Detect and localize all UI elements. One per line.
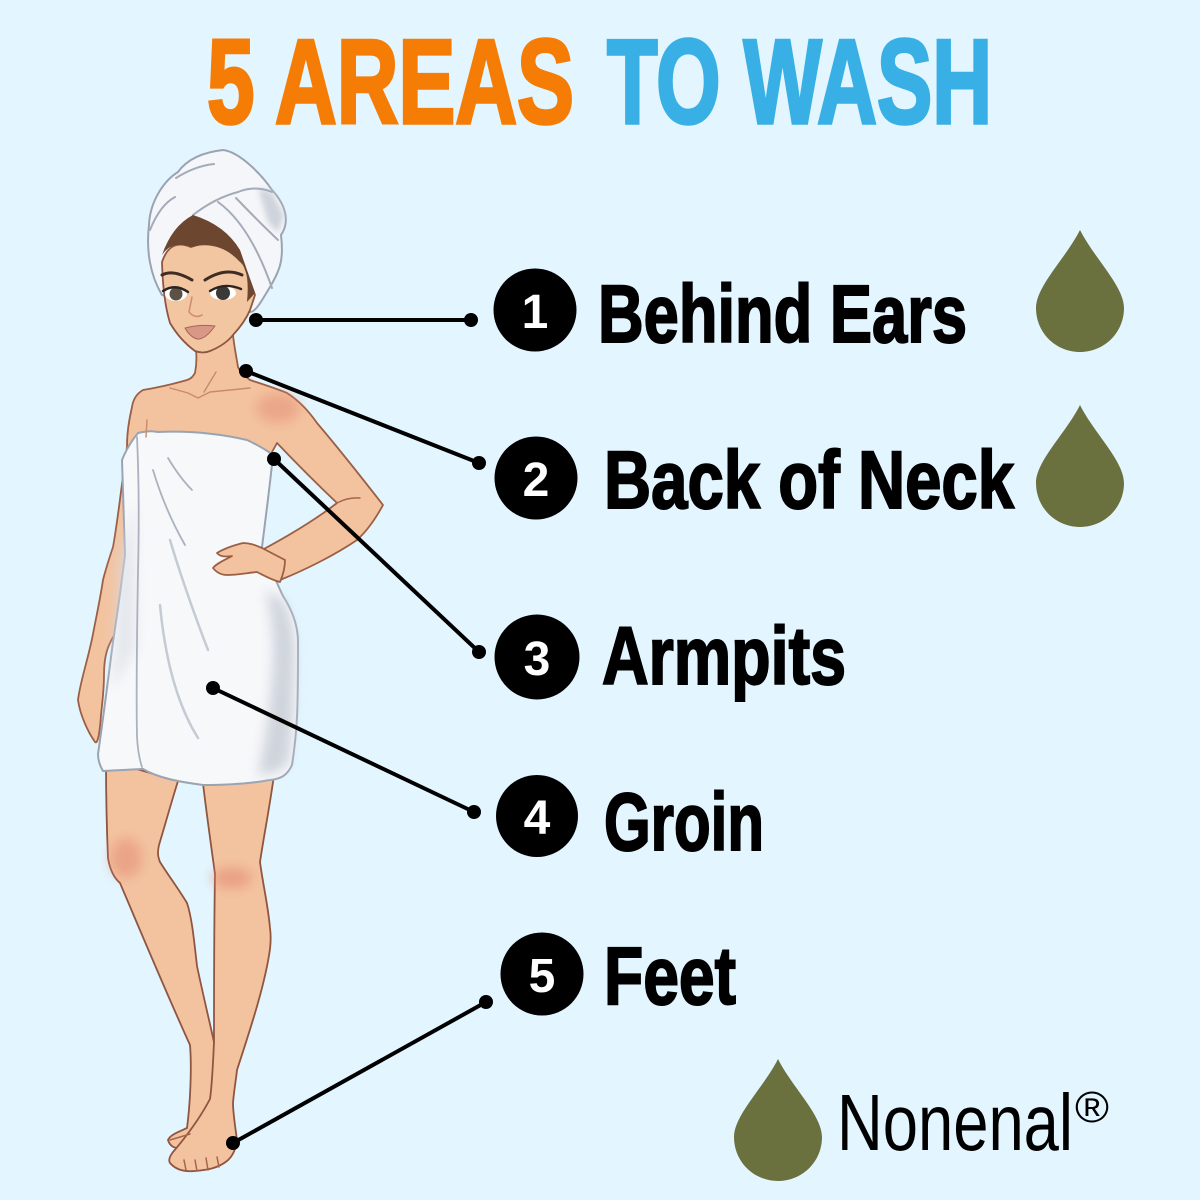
elbow crease bbox=[337, 498, 360, 503]
toe lines bbox=[170, 1134, 219, 1171]
badge 3: 3 bbox=[524, 633, 550, 686]
turban folds bbox=[150, 164, 278, 288]
badge 2: 2 bbox=[523, 454, 549, 507]
nose and lips bbox=[185, 297, 215, 339]
labels bbox=[598, 269, 1014, 1022]
knee shading bbox=[110, 838, 142, 878]
drop icon 2 bbox=[1036, 405, 1124, 527]
towel folds bbox=[137, 437, 208, 767]
left arm bbox=[78, 440, 135, 742]
label 3: Armpits bbox=[602, 611, 846, 702]
turban shade bbox=[258, 188, 284, 233]
torso and right arm bbox=[127, 335, 383, 580]
line 4 bbox=[206, 681, 481, 819]
connector lines bbox=[206, 313, 493, 1150]
towel body bbox=[98, 431, 298, 785]
title: 5 AREAS bbox=[207, 15, 574, 149]
title bbox=[207, 15, 992, 149]
label 4: Groin bbox=[604, 777, 764, 868]
label 1: Behind Ears bbox=[598, 269, 967, 360]
badge 1 bbox=[494, 268, 576, 352]
drop icon 1 bbox=[1036, 230, 1124, 352]
eyes bbox=[163, 286, 241, 301]
turban bbox=[148, 150, 286, 312]
eyebrows bbox=[162, 272, 242, 280]
badge 4: 4 bbox=[524, 792, 551, 845]
face bbox=[162, 243, 255, 352]
badge 1: 1 bbox=[522, 286, 548, 339]
hand bbox=[213, 543, 285, 582]
number badges bbox=[494, 268, 584, 1016]
drop icon: logo bbox=[734, 1059, 822, 1181]
line 3 bbox=[267, 452, 486, 659]
hair bbox=[162, 215, 255, 302]
badge 3 bbox=[494, 614, 580, 700]
label 5: Feet bbox=[604, 931, 736, 1022]
illustration: woman in towel bbox=[78, 150, 383, 1171]
towel side shade bbox=[112, 500, 136, 690]
line 2 bbox=[239, 364, 486, 470]
brand name: ® bbox=[1075, 1083, 1109, 1132]
towel shading bbox=[258, 590, 295, 775]
badge 5: 5 bbox=[529, 950, 555, 1003]
line 1 bbox=[249, 313, 478, 327]
collarbone bbox=[146, 372, 250, 437]
back leg bbox=[106, 760, 214, 1148]
badge 2 bbox=[494, 436, 578, 520]
front leg bbox=[169, 775, 274, 1171]
title: TO WASH bbox=[607, 15, 992, 149]
label 2: Back of Neck bbox=[604, 435, 1014, 526]
line 5 bbox=[226, 995, 493, 1150]
badge 5 bbox=[500, 932, 584, 1016]
badge 4 bbox=[496, 775, 578, 857]
brand name: Nonenal bbox=[837, 1078, 1073, 1167]
